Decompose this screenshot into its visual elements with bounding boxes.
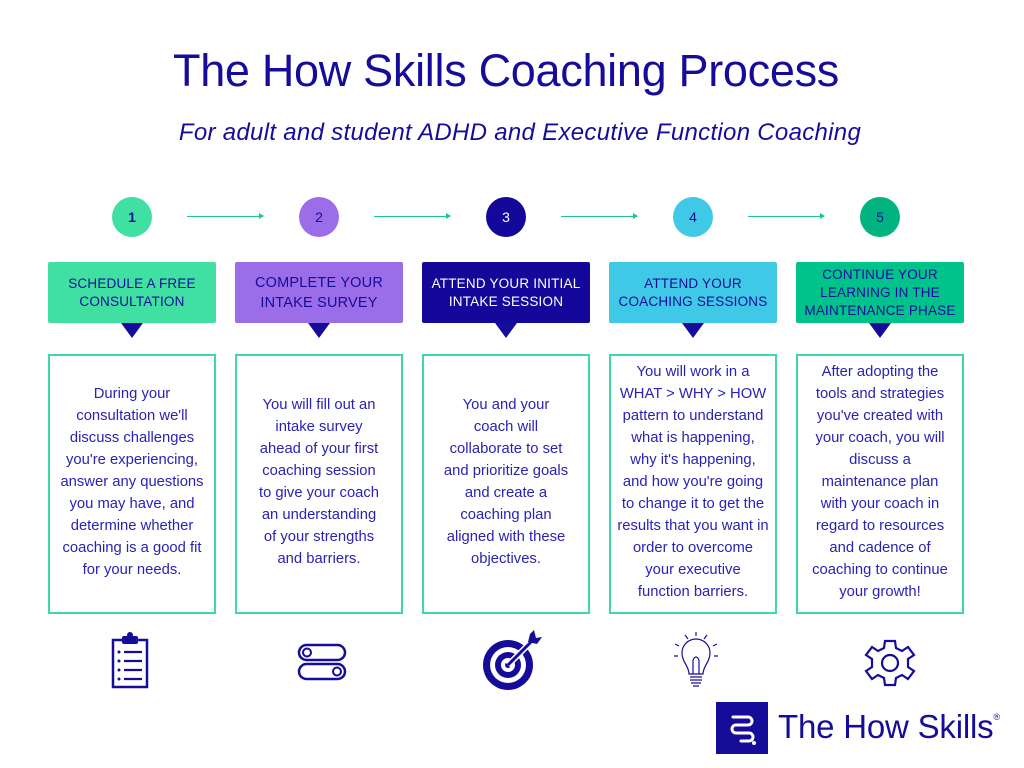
body text 4: pattern to understand [623, 408, 763, 424]
body text 5: tools and strategies [816, 386, 944, 402]
body text 1 [48, 354, 216, 614]
icon: light bulb [674, 632, 718, 687]
body text 4: what is happening, [631, 430, 755, 446]
body text 1: coaching is a good fit [62, 540, 202, 556]
body text 1: you may have, and [69, 496, 195, 512]
header 2: COMPLETE YOUR [255, 274, 383, 290]
header 5: LEARNING IN THE [820, 284, 940, 300]
body text 3: aligned with these [447, 529, 565, 545]
arrow 2 [374, 216, 450, 217]
header 4: COACHING SESSIONS [619, 294, 767, 308]
header 4: ATTEND YOUR [644, 276, 742, 290]
body text 3: and create a [465, 485, 547, 501]
step circle 5: 5 [876, 209, 884, 225]
body text 3 [422, 354, 590, 614]
body text 4: and how you're going [623, 474, 763, 490]
step circle 2: 2 [315, 209, 323, 225]
step circle 2 [299, 197, 339, 237]
header 1 [48, 262, 216, 323]
title: The How Skills Coaching Process [173, 45, 839, 96]
body text 2: You will fill out an [263, 397, 375, 413]
step circle 1 [112, 197, 152, 237]
pointer 2 [308, 323, 330, 338]
body text 2: ahead of your first [260, 441, 378, 457]
pointer 3 [495, 323, 517, 338]
logo [716, 702, 1000, 754]
body text 5: with your coach in [821, 496, 939, 512]
header 3: INTAKE SESSION [449, 294, 563, 308]
body text 1: discuss challenges [70, 430, 194, 446]
icon: gear [864, 640, 916, 686]
body text 4: function barriers. [638, 584, 748, 600]
body text 1: for your needs. [83, 562, 181, 578]
body text 5: your coach, you will [815, 430, 945, 446]
body text 3: coach will [474, 419, 538, 435]
body text 5: coaching to continue [812, 562, 948, 578]
step circle 1: 1 [128, 209, 136, 225]
logo mark [716, 702, 768, 754]
body text 3: You and your [463, 397, 549, 413]
body text 4: results that you want in [617, 518, 769, 534]
body text 2 [235, 354, 403, 614]
body text 2: coaching session [262, 463, 376, 479]
step circle 4 [673, 197, 713, 237]
subtitle: For adult and student ADHD and Executive Function Coaching [179, 119, 861, 146]
step circle 3: 3 [502, 209, 510, 225]
icon: clipboard [112, 632, 148, 688]
body text 3: coaching plan [460, 507, 552, 523]
body text 5: and cadence of [829, 540, 931, 556]
header 4 [609, 262, 777, 323]
arrow 3 [561, 216, 637, 217]
body text 2: of your strengths [264, 529, 374, 545]
header 3: ATTEND YOUR INITIAL [432, 276, 580, 290]
step circle 3 [486, 197, 526, 237]
step circle 4: 4 [689, 209, 697, 225]
body text 5: discuss a [849, 452, 911, 468]
header 5 [796, 262, 964, 323]
body text 5 [796, 354, 964, 614]
body text 5: you've created with [817, 408, 943, 424]
body text 4: to change it to get the [622, 496, 764, 512]
pointer 5 [869, 323, 891, 338]
body text 1: During your [94, 386, 170, 402]
body text 5: After adopting the [822, 364, 938, 380]
icon: target [483, 630, 542, 690]
body text 5: regard to resources [816, 518, 944, 534]
body text 1: consultation we'll [76, 408, 188, 424]
arrow 4 [748, 216, 824, 217]
arrow 1 [187, 216, 263, 217]
body text 3: collaborate to set [450, 441, 562, 457]
body text 4 [609, 354, 777, 614]
step circle 5 [860, 197, 900, 237]
header 1: SCHEDULE A FREE [68, 276, 196, 290]
header 2 [235, 262, 403, 323]
body text 4: WHAT > WHY > HOW [620, 386, 766, 402]
pointer 1 [121, 323, 143, 338]
body text 1: answer any questions [60, 474, 204, 490]
body text 4: why it's happening, [630, 452, 756, 468]
header 1: CONSULTATION [79, 294, 185, 308]
body text 2: to give your coach [259, 485, 379, 501]
body text 3: objectives. [471, 551, 541, 567]
header 3 [422, 262, 590, 323]
icon: toggles [298, 644, 346, 680]
body text 2: and barriers. [277, 551, 361, 567]
header 2: INTAKE SURVEY [260, 294, 378, 310]
header 5: CONTINUE YOUR [822, 266, 938, 282]
header 5: MAINTENANCE PHASE [804, 302, 956, 318]
body text 5: your growth! [839, 584, 921, 600]
body text 2: intake survey [275, 419, 363, 435]
body text 4: order to overcome [633, 540, 753, 556]
body text 1: you're experiencing, [66, 452, 198, 468]
body text 4: your executive [645, 562, 741, 578]
body text 1: determine whether [71, 518, 193, 534]
body text 3: and prioritize goals [444, 463, 568, 479]
body text 5: maintenance plan [822, 474, 938, 490]
logo text: The How Skills® [778, 708, 1000, 745]
pointer 4 [682, 323, 704, 338]
body text 2: an understanding [262, 507, 376, 523]
body text 4: You will work in a [637, 364, 749, 380]
